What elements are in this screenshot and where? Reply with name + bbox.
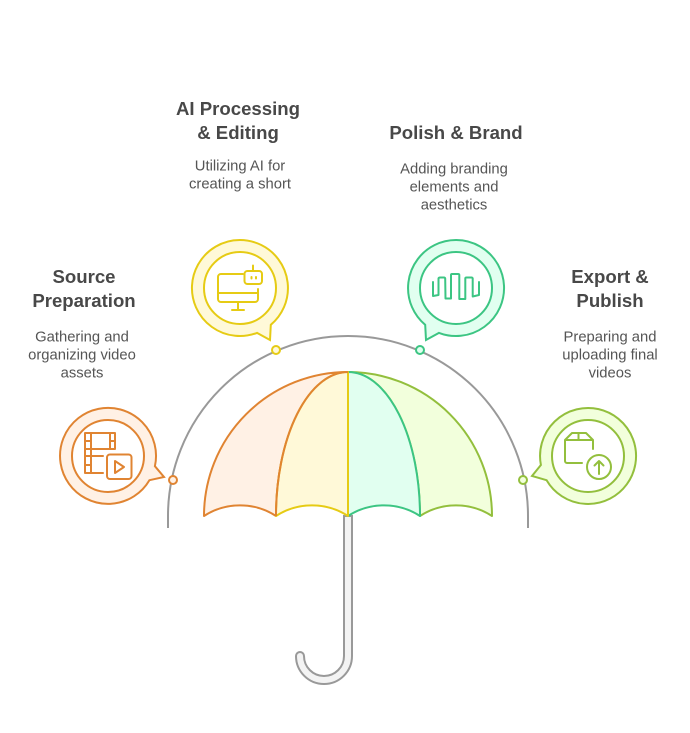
description: elements and [410,180,498,196]
inner circle [552,420,624,492]
umbrella handle [296,516,352,684]
description: uploading final [562,348,658,364]
heading: Publish [576,290,644,311]
panel: source preparation [28,266,164,504]
canopy segment: green [348,372,420,516]
dot: yellow [272,346,280,354]
panel: export and publish [532,266,658,504]
panel: ai processing [176,98,300,340]
icon: film and play [85,433,132,479]
description: aesthetics [421,198,487,214]
heading: Export & [571,266,649,287]
marker dots [169,346,527,484]
heading: Source [52,266,116,287]
dot: orange [169,476,177,484]
speech bubble [60,408,164,504]
dot: lime [519,476,527,484]
description: Adding branding [400,162,508,178]
icon: box with upload arrow [565,433,611,479]
description: videos [589,366,631,382]
heading: Preparation [32,290,136,311]
panel: polish and brand [389,122,523,340]
umbrella canopy [204,372,492,516]
speech bubble [192,240,288,340]
description: Utilizing AI for [195,158,285,174]
canopy segment: lime [348,372,492,516]
inner circle [204,252,276,324]
speech bubble [532,408,636,504]
canopy seam: orange [276,372,348,516]
speech bubble [408,240,504,340]
heading: & Editing [197,122,279,143]
inner circle [420,252,492,324]
canopy segment: orange [204,372,348,516]
outer arc [168,336,528,528]
inner circle [72,420,144,492]
icon: waveform [433,274,479,299]
description: creating a short [189,176,291,192]
heading: AI Processing [176,98,300,119]
description: assets [61,366,103,382]
canopy segment: yellow [276,372,348,516]
dot: green [416,346,424,354]
heading: Polish & Brand [389,122,523,143]
description: Preparing and [564,330,656,346]
description: Gathering and [35,330,129,346]
description: organizing video [28,348,136,364]
icon: monitor with robot [218,266,262,310]
